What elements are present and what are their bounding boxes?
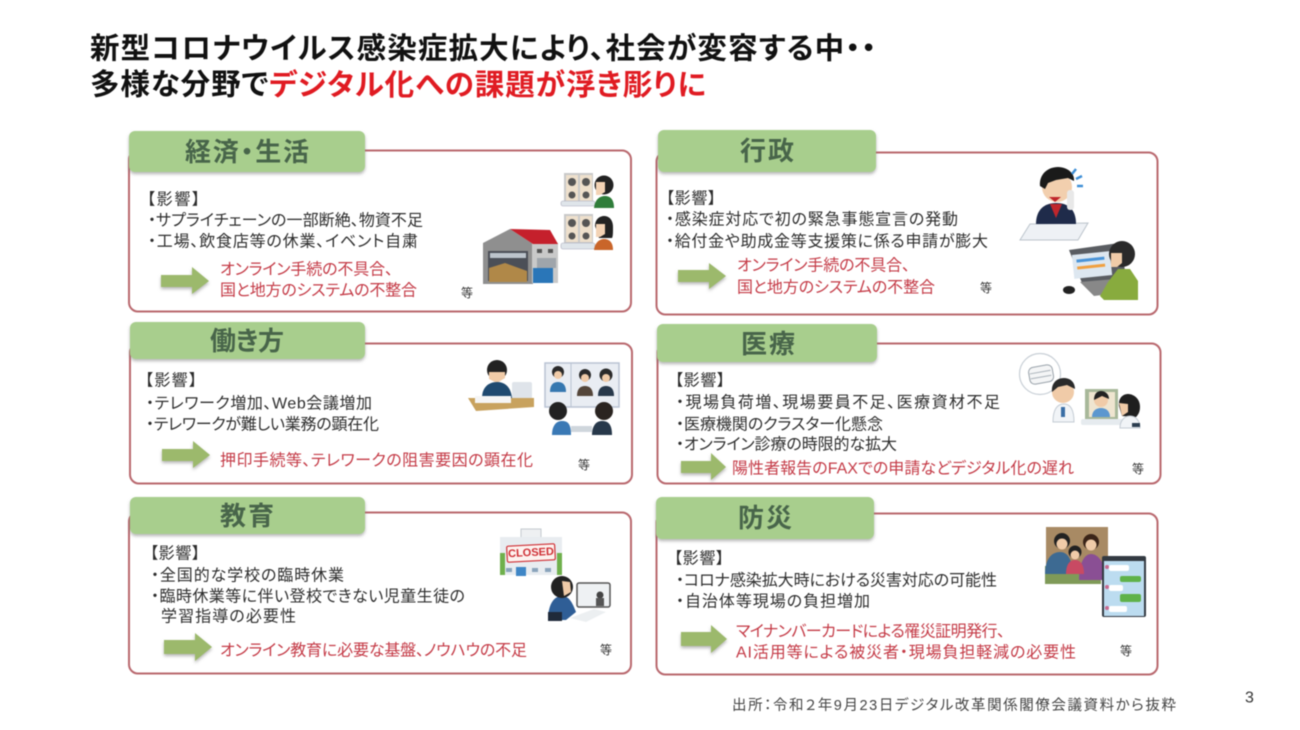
text: digital issue: 国と地方のシステムの不整合 [220,282,417,300]
icon: warehouse [483,229,558,284]
icon: online consultation [1081,389,1140,428]
icon: smartphone messaging [1102,556,1146,617]
text: impacts: 【影響】 [145,372,197,390]
text: digital issue: 等 [980,281,992,295]
icon: video call woman [561,173,614,208]
text: impacts [145,372,379,434]
title [90,32,876,102]
icon: doctor [1052,378,1075,422]
text: digital issue: 等 [1120,644,1132,658]
text: digital issue [737,256,992,296]
text: impacts: ・全国的な学校の臨時休業 [151,566,344,584]
icon: mask thought bubble [1020,354,1060,394]
panel: disaster prevention [656,497,1158,674]
heading: disaster prevention [656,497,874,539]
text: digital issue: オンライン教育に必要な基盤、ノウハウの不足 [220,642,527,660]
text: digital issue: マイナンバーカードによる罹災証明発行、 [736,622,1005,640]
text: impacts [666,190,988,250]
icon: man on phone [1020,167,1088,240]
text: digital issue: オンライン手続の不具合、 [737,256,910,274]
text: impacts: ・医療機関のクラスター化懸念 [676,416,883,434]
heading: disaster prevention: 防災 [738,503,792,533]
icon: closed school [500,529,562,576]
panel: education [129,497,631,674]
text: digital issue: 国と地方のシステムの不整合 [737,278,935,296]
arrow [678,263,726,289]
text: digital issue [220,260,473,300]
title: 多様な分野でデジタル化への課題が浮き彫りに [90,68,706,102]
text: digital issue: 押印手続等、テレワークの阻害要因の顕在化 [220,452,533,470]
text: impacts: 【影響】 [150,544,200,562]
text: digital issue: 等 [1132,462,1144,476]
icon: person at computer [1063,241,1138,300]
text: impacts [150,544,465,626]
icon: student with tablet [548,576,610,622]
text: impacts: ・工場、飲食店等の休業、イベント自粛 [148,232,418,250]
heading: economy and life: 経済・生活 [185,137,309,167]
text: impacts: 学習指導の必要性 [161,606,296,626]
heading: administration: 行政 [740,136,794,166]
arrow [681,625,727,653]
icon: evacuated family [1045,527,1108,584]
text: digital issue: AI活用等による被災者・現場負担軽減の必要性 [736,644,1076,662]
text: impacts: 【影響】 [147,190,200,208]
icon: video call woman 2 [561,214,613,250]
text: digital issue: 等 [461,286,473,300]
arrow [162,441,210,468]
text: impacts: ・テレワーク増加、Web会議増加 [146,394,372,412]
text: impacts [675,372,1000,454]
page number: 3 [1245,690,1254,706]
text: impacts: ・現場負荷増、現場要員不足、医療資材不足 [676,394,1000,412]
text: impacts: 【影響】 [675,372,725,390]
text: digital issue: 陽性者報告のFAXでの申請などデジタル化の遅れ [732,458,1074,478]
panel: ways of working [130,322,632,484]
icon: video conference [545,363,619,435]
text: digital issue: 等 [600,643,612,657]
panel: economy and life [129,131,631,312]
text: impacts: 【影響】 [674,550,724,568]
text: impacts: ・テレワークが難しい業務の顕在化 [146,416,379,434]
text: digital issue: オンライン手続の不具合、 [220,260,393,278]
icon: closed school: CLOSED [508,546,554,560]
text: digital issue: 等 [578,458,590,472]
heading: education [130,497,365,534]
heading: healthcare: 医療 [741,329,795,359]
text: impacts: ・コロナ感染拡大時における災害対応の可能性 [676,572,997,590]
text: impacts [147,190,423,250]
text: impacts: ・感染症対応で初の緊急事態宣言の発動 [666,210,958,228]
text: impacts: ・サプライチェーンの一部断絶、物資不足 [148,212,423,230]
text: impacts: ・オンライン診療の時限的な拡大 [676,436,897,454]
heading: economy and life [129,131,365,172]
panel: administration [656,130,1158,314]
title: 新型コロナウイルス感染症拡大により、社会が変容する中・・ [90,32,876,66]
text: impacts: ・臨時休業等に伴い登校できない児童生徒の [151,588,465,606]
text: impacts [674,550,997,610]
arrow [164,633,212,661]
arrow [681,453,726,480]
heading: healthcare [657,324,877,362]
icon: man at desk [468,360,534,411]
heading: ways of working: 働き方 [210,326,284,356]
text: impacts: 【影響】 [666,190,716,208]
heading: education: 教育 [220,501,274,531]
text: digital issue [736,622,1132,662]
heading: ways of working [130,322,365,359]
source note: 出所：令和２年9月23日デジタル改革関係閣僚会議資料から抜粋 [732,696,1176,714]
heading: administration [658,130,876,172]
panel: healthcare [657,324,1160,484]
text: impacts: ・自治体等現場の負担増加 [676,592,870,610]
arrow [161,267,209,294]
text: impacts: ・給付金や助成金等支援策に係る申請が膨大 [666,232,988,250]
